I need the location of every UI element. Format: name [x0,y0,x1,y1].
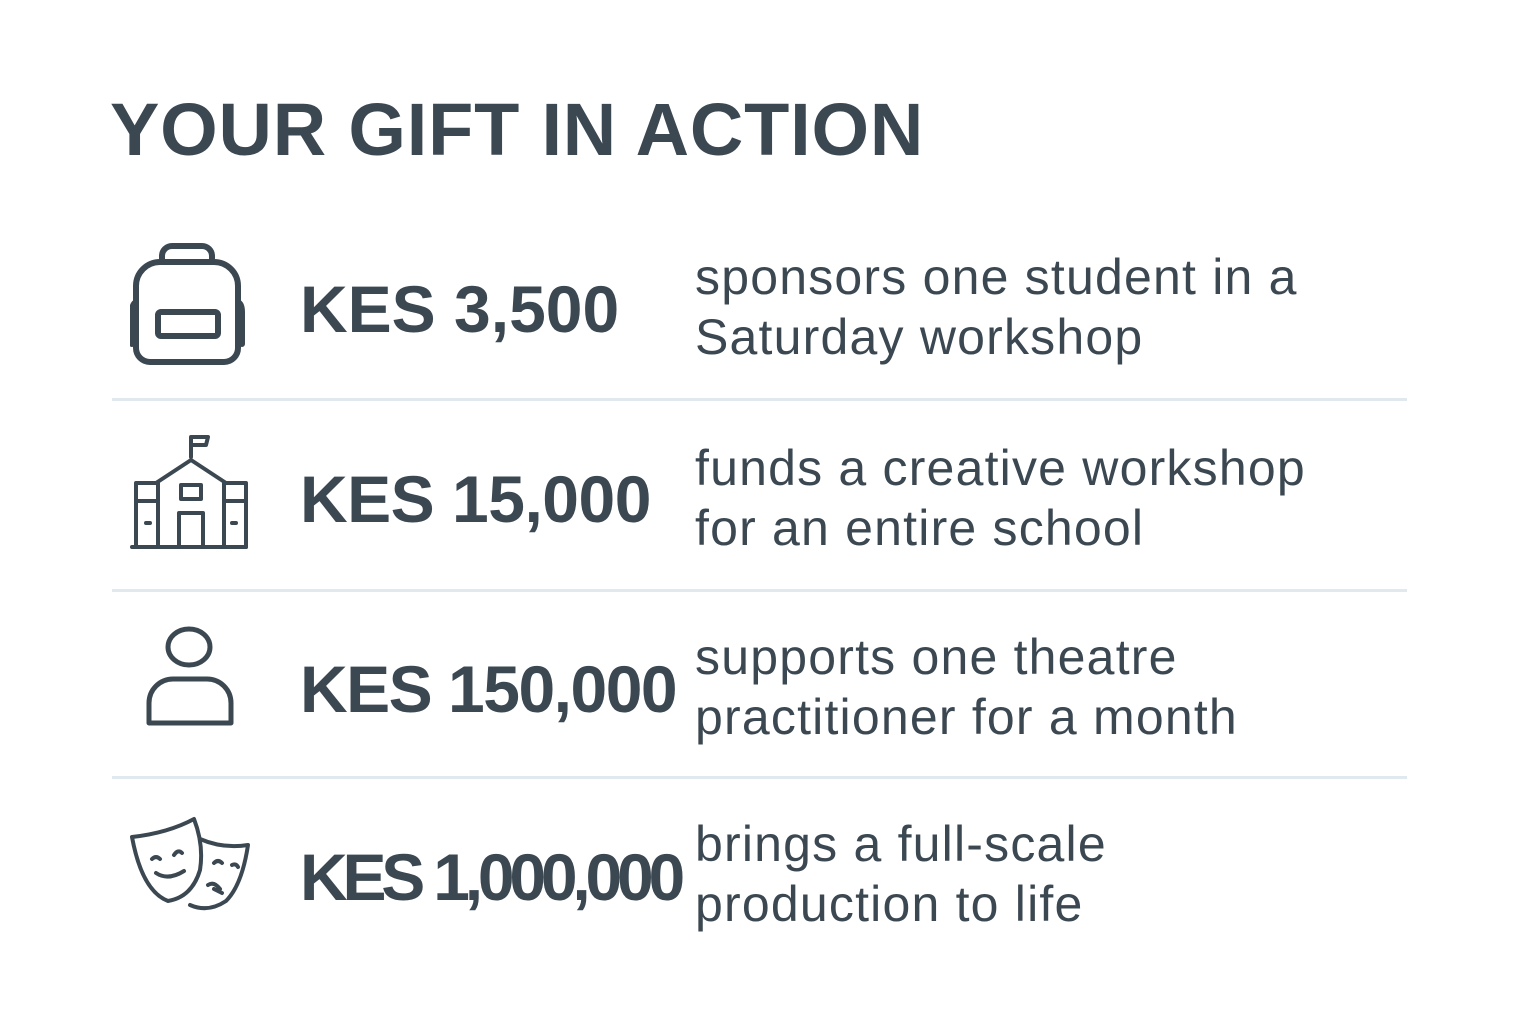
icon: person [146,626,234,726]
description 4 [695,816,1107,932]
description 4: production to life [695,876,1084,932]
description 4: brings a full-scale [695,816,1107,872]
amount 1: KES 3,500 [300,272,619,346]
icon: theatre masks [130,816,250,910]
icon: school [130,435,248,549]
description 3: supports one theatre [695,629,1178,685]
description 3: practitioner for a month [695,689,1238,745]
title: YOUR GIFT IN ACTION [110,88,924,171]
description 1 [695,249,1298,365]
amount 4: KES 1,000,000 [300,840,680,914]
description 2: funds a creative workshop [695,440,1306,496]
icon: backpack [130,243,245,365]
amount 3: KES 150,000 [300,652,676,726]
description 1: Saturday workshop [695,309,1143,365]
description 2 [695,440,1306,556]
description 1: sponsors one student in a [695,249,1298,305]
description 3 [695,629,1238,745]
amount 2: KES 15,000 [300,462,651,536]
description 2: for an entire school [695,500,1144,556]
